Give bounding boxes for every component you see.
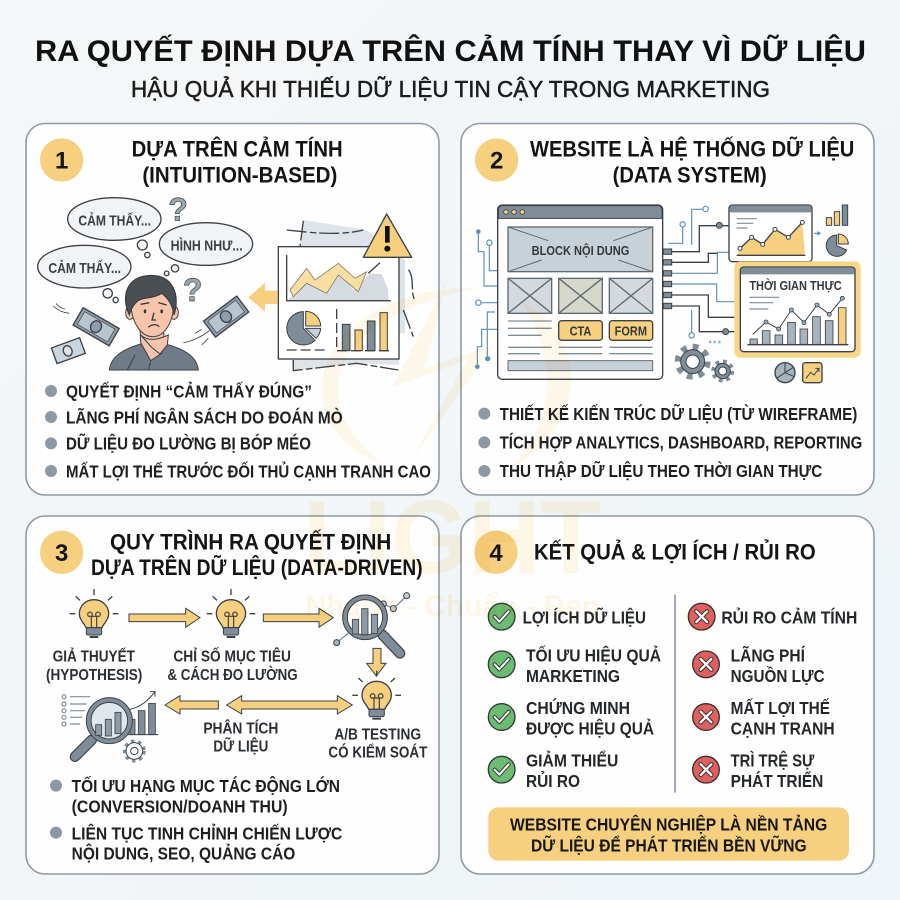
column: benefits [488, 603, 661, 791]
bullet list 1 [45, 381, 431, 481]
label: data analysis: PHÂN TÍCH [203, 719, 278, 737]
arrow: from report to person [248, 283, 277, 312]
label: data analysis [203, 719, 278, 756]
bullet list 3: NỘI DUNG, SEO, QUẢNG CÁO [72, 842, 295, 863]
content block [508, 227, 653, 272]
content block: BLOCK NỘI DUNG [532, 243, 629, 258]
callout: DỮ LIỆU ĐỂ PHÁT TRIỂN BỀN VỮNG [531, 835, 807, 855]
heading 2 [530, 136, 854, 187]
panel: card backgrounds [26, 124, 874, 874]
number badge 1: 1 [55, 148, 68, 175]
bullet list 1: MẤT LỢI THẾ TRƯỚC ĐỐI THỦ CẠNH TRANH CAO [66, 460, 431, 481]
panel: intuition-based [38, 137, 431, 481]
icon: gears [678, 341, 732, 380]
icon: magnifier over bars [334, 593, 410, 653]
watermark: logo [303, 280, 601, 623]
label: hypothesis: (HYPOTHESIS) [46, 667, 142, 684]
image placeholders [508, 278, 653, 313]
column: benefits: TỐI ƯU HIỆU QUẢ [526, 646, 661, 666]
subtitle: HẬU QUẢ KHI THIẾU DỮ LIỆU TIN CẬY TRONG MARKETING [131, 74, 770, 102]
label: A/B testing: CÓ KIỂM SOÁT [328, 743, 428, 761]
bullet list 3: TỐI ƯU HẠNG MỤC TÁC ĐỘNG LỚN [72, 775, 340, 796]
icon: metric bulb [207, 589, 255, 637]
column: risks: CẠNH TRANH [731, 718, 835, 738]
column: risks: TRÌ TRỆ SỰ [731, 751, 815, 771]
arrow: down to testing [367, 648, 386, 676]
label: hypothesis [46, 649, 142, 684]
data connectors [475, 206, 740, 369]
column: benefits: ĐƯỢC HIỆU QUẢ [526, 718, 654, 738]
label: A/B testing [328, 726, 428, 761]
column: benefits: MARKETING [526, 666, 620, 686]
icon: worried person [109, 275, 198, 370]
thought bubbles: HÌNH NHƯ... [171, 237, 243, 254]
icons: pie and trend [775, 363, 822, 383]
icon: question marks: ? [168, 192, 188, 228]
arrow: step 2 to 3 [263, 608, 333, 627]
callout: WEBSITE CHUYÊN NGHIỆP LÀ NỀN TẢNG [510, 815, 827, 835]
icon: flying money [51, 296, 249, 364]
arrow: to analysis icon [165, 696, 218, 714]
arrow: double headed [227, 696, 352, 714]
column: benefits: RỦI RO [526, 771, 580, 791]
heading 1: (INTUITION-BASED) [142, 162, 337, 187]
panel: results and risks [474, 531, 857, 861]
column: risks: PHÁT TRIỂN [731, 771, 823, 791]
title: RA QUYẾT ĐỊNH DỰA TRÊN CẢM TÍNH THAY VÌ DỮ LIỆU [35, 34, 866, 68]
number badge 2: 2 [490, 148, 503, 175]
column: benefits: CHỨNG MINH [526, 698, 630, 718]
icon: hypothesis bulb [70, 589, 118, 637]
watermark: logo: LIGHT [303, 480, 601, 596]
column: benefits: LỢI ÍCH DỮ LIỆU [523, 608, 646, 628]
heading 1 [132, 137, 343, 187]
bullet list 1: LÃNG PHÍ NGÂN SÁCH DO ĐOÁN MÒ [66, 406, 343, 427]
CTA button [559, 321, 602, 340]
thought bubbles [38, 198, 253, 303]
icon: distorted report with warning [278, 214, 415, 371]
bullet list 1: DỮ LIỆU ĐO LƯỜNG BỊ BÓP MÉO [66, 432, 311, 453]
bullet list 2 [478, 403, 862, 481]
website wireframe window [498, 205, 663, 379]
dashboard card [729, 205, 812, 262]
column divider [672, 594, 677, 793]
bullet list 3: (CONVERSION/DOANH THU) [72, 796, 288, 816]
bullet list 3: LIÊN TỤC TINH CHỈNH CHIẾN LƯỢC [72, 822, 343, 843]
number badge 4 [474, 531, 518, 574]
label: data analysis: DỮ LIỆU [213, 738, 268, 756]
label: target metrics: & CÁCH ĐO LƯỜNG [167, 666, 298, 684]
icon: question marks [168, 192, 202, 308]
form button: FORM [615, 323, 647, 338]
bullet list 2: THU THẬP DỮ LIỆU THEO THỜI GIAN THỰC [500, 460, 823, 481]
callout [488, 807, 849, 861]
column: risks: NGUỒN LỰC [731, 666, 825, 686]
watermark: logo: Nhanh - Chuẩn - Đẹp [305, 590, 600, 623]
column: risks: RỦI RO CẢM TÍNH [721, 608, 857, 628]
heading 2: WEBSITE LÀ HỆ THỐNG DỮ LIỆU [530, 136, 854, 162]
heading 3 [91, 529, 423, 580]
column: risks: LÃNG PHÍ [731, 646, 806, 666]
label: hypothesis: GIẢ THUYẾT [53, 649, 136, 666]
label: target metrics [167, 648, 298, 684]
number badge 3 [40, 531, 83, 574]
panel: data-driven process [40, 529, 428, 863]
number badge 4: 4 [489, 540, 503, 567]
form button [609, 321, 653, 340]
number badge 3: 3 [55, 540, 68, 567]
arrow: step 1 to 2 [129, 608, 200, 627]
bullet list 1: QUYẾT ĐỊNH “CẢM THẤY ĐÚNG” [66, 381, 312, 402]
thought bubbles: CẢM THẤY... [48, 260, 121, 277]
CTA button: CTA [570, 323, 592, 338]
number badge 1 [40, 138, 83, 182]
label: A/B testing: A/B TESTING [334, 726, 421, 743]
bullet list 3 [50, 775, 343, 863]
heading 3: DỰA TRÊN DỮ LIỆU (DATA-DRIVEN) [91, 555, 423, 580]
label: target metrics: CHỈ SỐ MỤC TIÊU [173, 648, 291, 666]
heading 2: (DATA SYSTEM) [613, 162, 767, 187]
heading 1: DỰA TRÊN CẢM TÍNH [132, 137, 343, 162]
icon: analysis magnifier [62, 692, 158, 761]
panel: data system [475, 136, 862, 481]
number badge 2 [475, 138, 518, 182]
heading 3: QUY TRÌNH RA QUYẾT ĐỊNH [110, 529, 391, 554]
icon: testing bulb [352, 671, 401, 719]
real-time card [734, 261, 861, 358]
heading 4: KẾT QUẢ & LỢI ÍCH / RỦI RO [534, 539, 816, 564]
real-time card: THỜI GIAN THỰC [749, 278, 842, 293]
thought bubbles: CẢM THẤY... [78, 212, 151, 229]
icon: question marks: ? [183, 272, 202, 308]
column: risks: MẤT LỢI THẾ [731, 698, 830, 718]
icons: bars and pie [814, 205, 848, 256]
column: benefits: GIẢM THIỂU [526, 751, 618, 771]
column: risks [688, 603, 857, 791]
